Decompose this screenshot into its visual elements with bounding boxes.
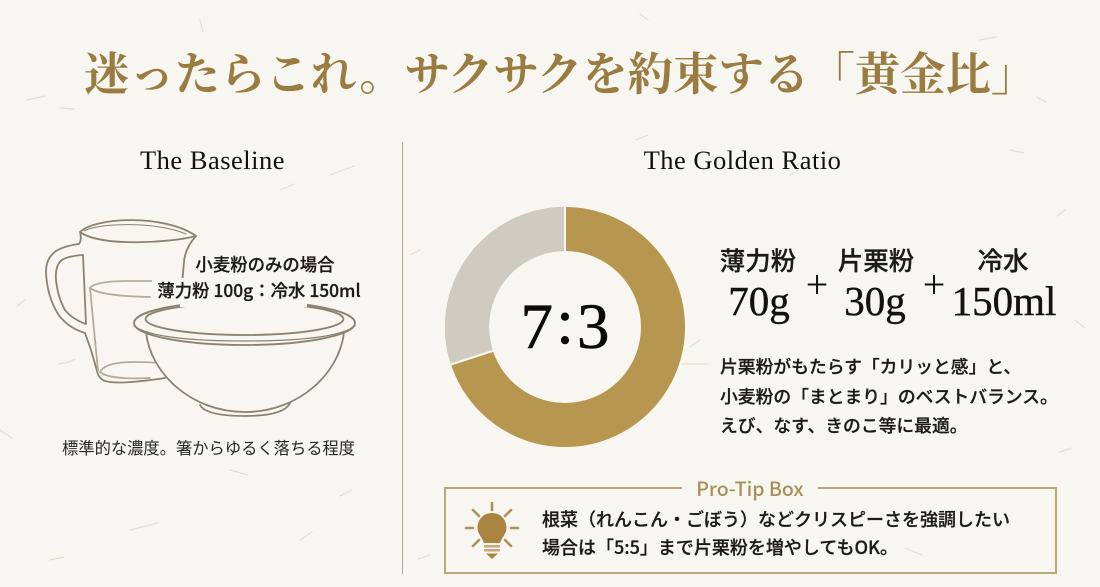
amount: 70g: 70g [728, 278, 790, 324]
pro-tip label: Pro-Tip Box [696, 473, 804, 502]
pro-tip label [682, 477, 818, 499]
panel: pro-tip box [444, 487, 1057, 574]
amount: 30g: 30g [844, 278, 906, 324]
description text: 小麦粉の「まとまり」のベストバランス。 [720, 382, 1058, 408]
heading: The Golden Ratio: The Golden Ratio [644, 145, 841, 175]
tip text: 根菜（れんこん・ごぼう）などクリスピーさを強調したい [542, 506, 1010, 532]
amount: 150ml: 150ml [952, 278, 1056, 324]
label: flour only: 小麦粉のみの場合 [195, 252, 335, 277]
ingredient: cold water: 冷水 [977, 241, 1028, 278]
column divider [402, 142, 403, 574]
label: flour and water amounts: 薄力粉 100g：冷水 150ml [157, 278, 361, 303]
ingredient: cake flour: 薄力粉 [720, 241, 796, 278]
description text: 片栗粉がもたらす「カリッと感」と、 [720, 353, 1021, 379]
tip text: 場合は「5:5」まで片栗粉を増やしてもOK。 [542, 534, 898, 560]
heading: The Baseline: The Baseline [140, 145, 285, 175]
caption: standard batter: 標準的な濃度。箸からゆるく落ちる程度 [62, 435, 355, 459]
ingredient: potato starch: 片栗粉 [838, 241, 914, 278]
plus sign: + [923, 262, 945, 307]
icon: light bulb [464, 502, 520, 559]
description text: えび、なす、きのこ等に最適。 [720, 412, 968, 438]
plus sign: + [806, 262, 828, 307]
recipe formula [720, 241, 1056, 324]
title: 迷ったらこれ。サクサクを約束する「黄金比」 [84, 38, 1036, 103]
donut centre value: 7:3 [520, 286, 610, 363]
mask over bowl rim [180, 302, 307, 307]
description text [720, 353, 1058, 438]
text block: flour-only recipe [152, 252, 361, 307]
tip text [542, 506, 1010, 560]
